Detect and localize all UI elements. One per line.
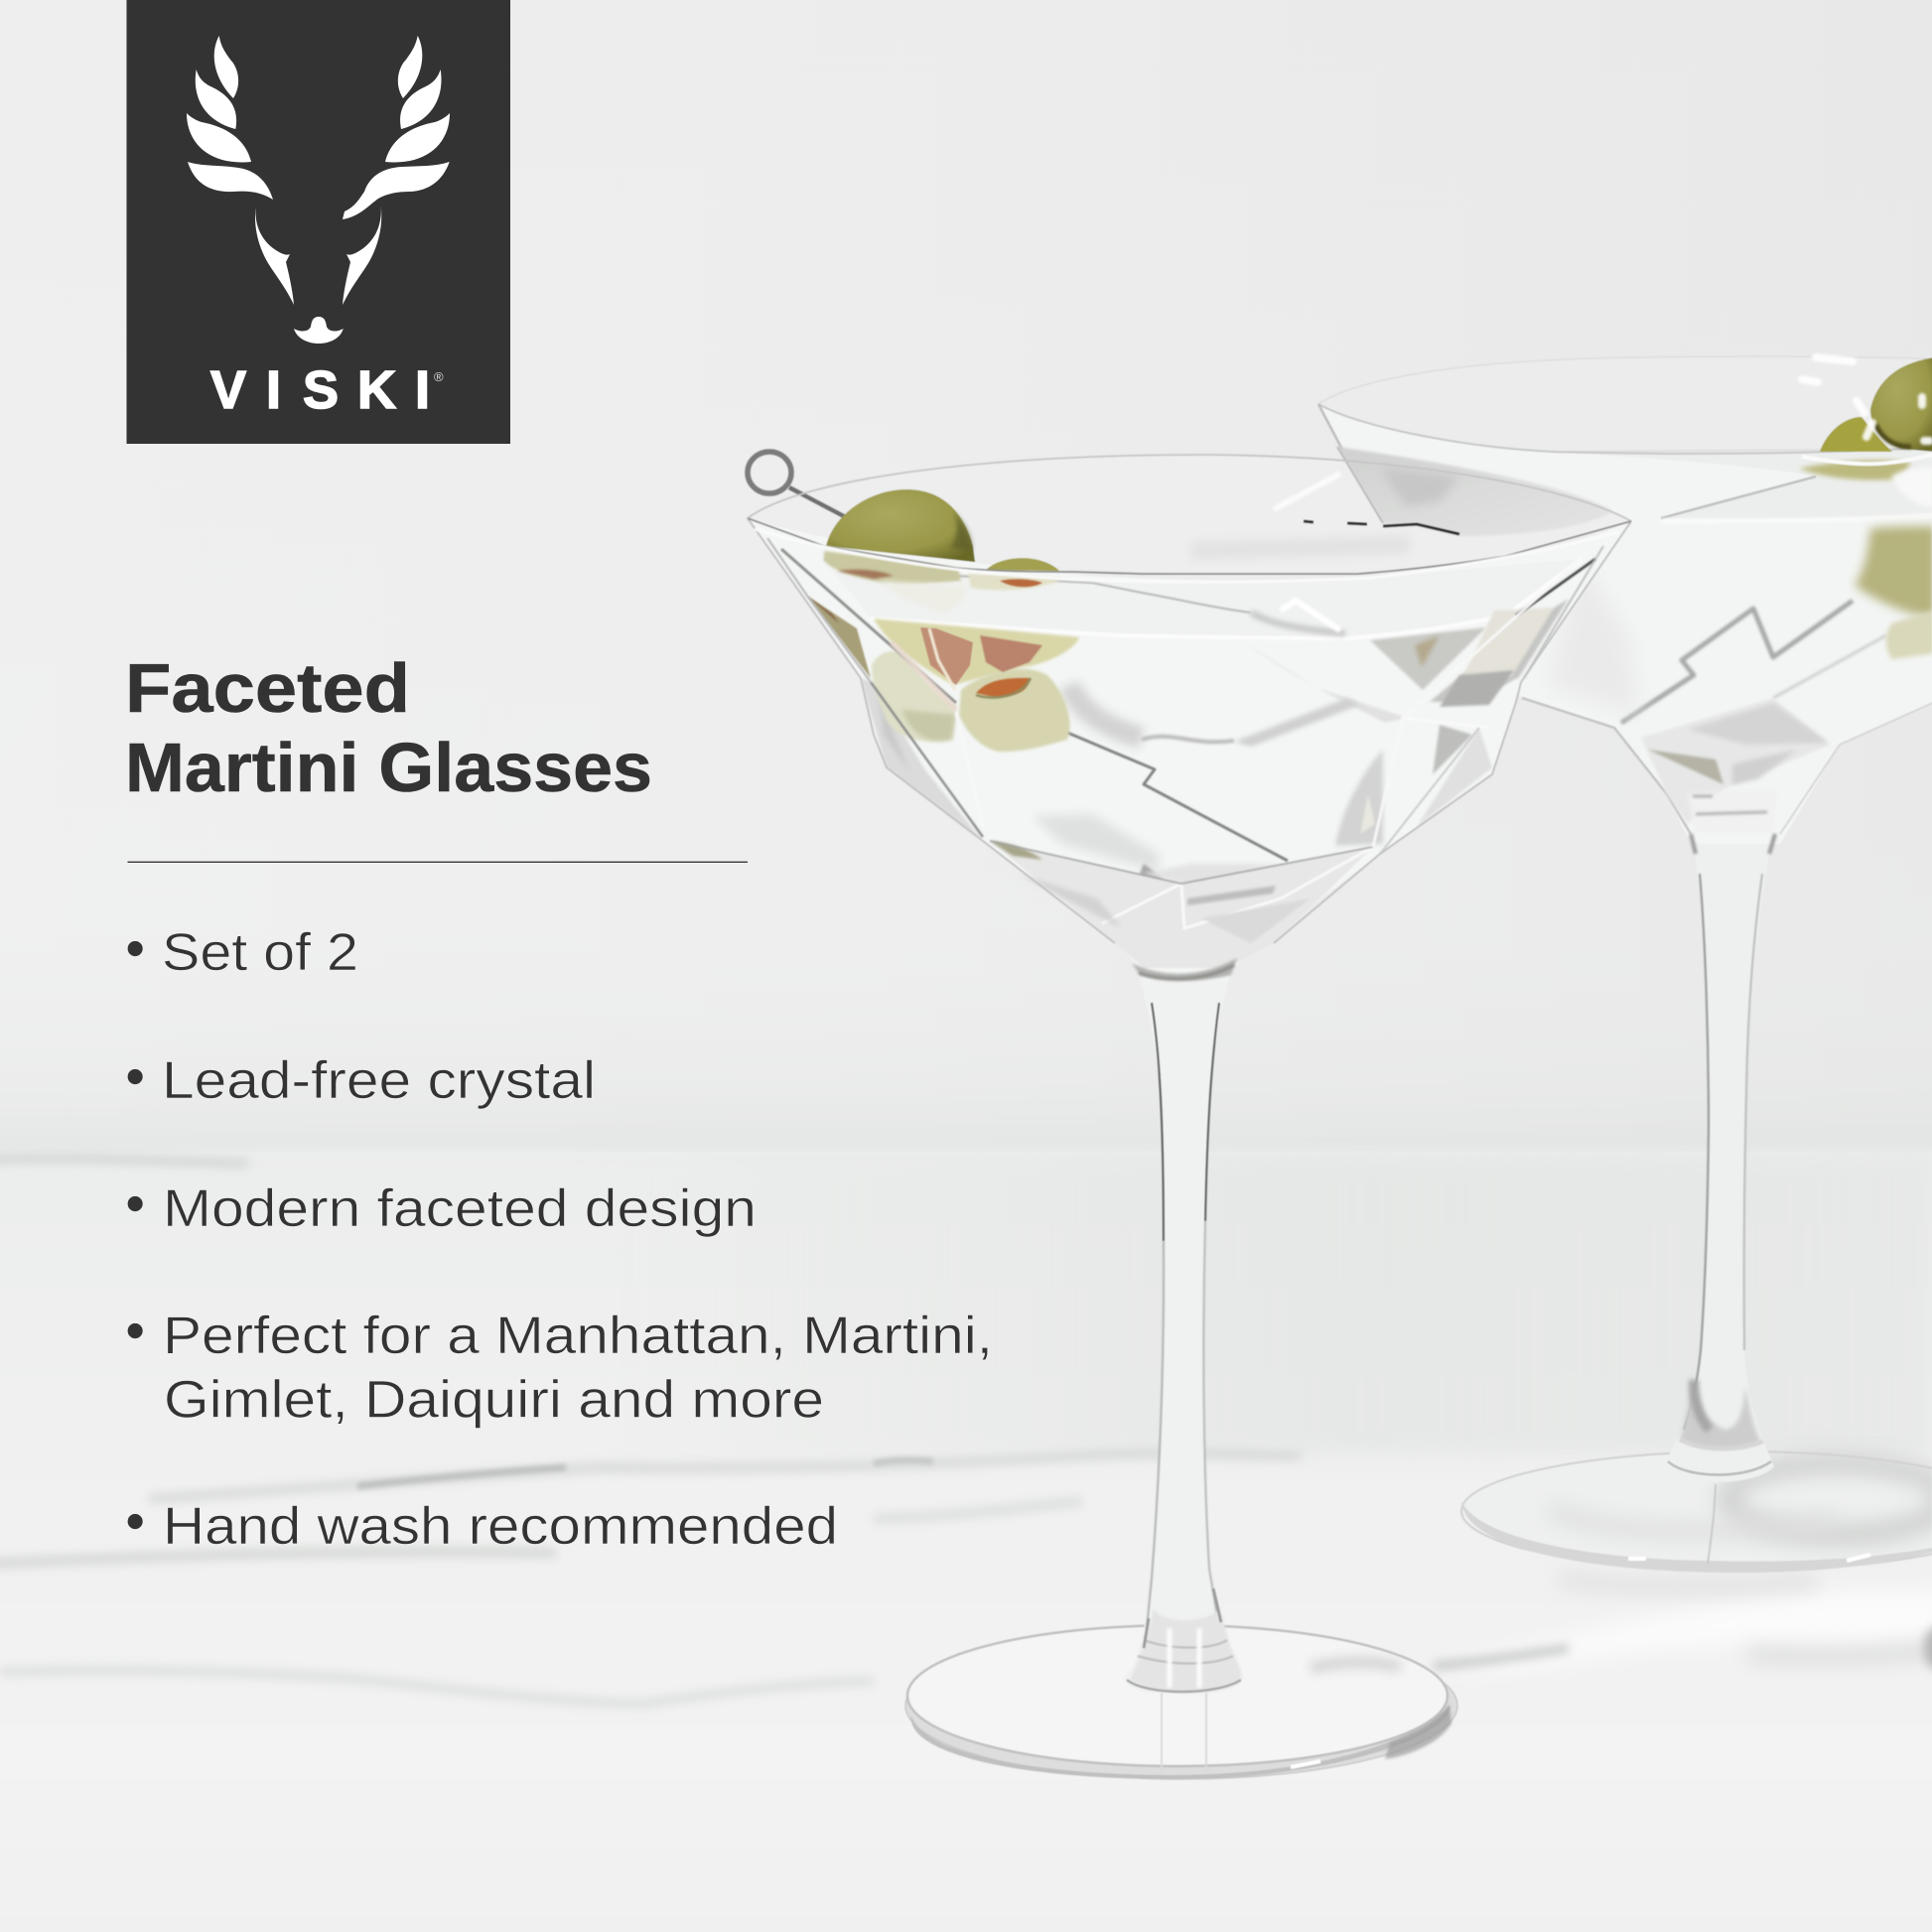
logo block (127, 0, 510, 444)
bullet: perfect for cocktails: • (125, 1299, 145, 1363)
logo: wordmark: VISKI (210, 360, 430, 420)
refracted olive band in liquid (874, 619, 1079, 685)
front glass: liquid surface band (824, 559, 1582, 640)
front glass: air above liquid (748, 455, 1631, 575)
divider line (127, 862, 748, 863)
logo: right antler leaves (343, 36, 450, 305)
front glass: back glass seen through rim (1337, 447, 1613, 536)
front glass: left side facets (861, 678, 983, 841)
bullet: set of 2: • (125, 916, 145, 981)
front glass: skewer and pick ring (748, 452, 844, 516)
bullet: lead-free crystal: • (125, 1044, 145, 1109)
back glass: zigzag refraction (1621, 601, 1853, 723)
bullet: lead-free crystal: Lead-free crystal (162, 1051, 596, 1110)
title (125, 649, 652, 806)
bullet: modern faceted design: • (125, 1172, 145, 1236)
olive above rim (826, 489, 975, 562)
feature list (125, 916, 993, 1556)
bullet: modern faceted design: Modern faceted design (163, 1179, 757, 1238)
tan wedge at left of bowl (807, 596, 871, 678)
second olive (986, 558, 1059, 571)
back glass: stem (1663, 834, 1774, 1482)
bullet: set of 2 (125, 916, 358, 982)
front glass: olives (767, 489, 1079, 837)
logo: left antler leaves (187, 36, 294, 305)
pale olive right (959, 669, 1070, 752)
olive below rim (824, 551, 961, 586)
title: Martini Glasses (125, 729, 652, 806)
back glass: olives above rim (1870, 357, 1932, 452)
front glass: rim (748, 455, 1631, 582)
back glass: bowl (1318, 356, 1932, 854)
light and shadows on the table (1430, 1579, 1932, 1670)
front martini glass (748, 447, 1631, 1779)
front glass: zigzag refraction (1065, 732, 1288, 861)
back glass: shaded side of liquid (1549, 556, 1638, 715)
front glass: stem (1123, 949, 1245, 1694)
bullet: hand wash: • (125, 1489, 145, 1554)
front glass: base (905, 1625, 1457, 1779)
bullet: hand wash: Hand wash recommended (163, 1497, 838, 1556)
front glass: interior shadow facets (1370, 627, 1486, 690)
back martini glass (1318, 356, 1932, 1573)
back glass: olive below rim (1799, 461, 1911, 481)
logo: nose (294, 317, 344, 344)
front glass: right side wedge (1430, 599, 1569, 702)
pale olive left (872, 651, 956, 742)
back glass: submerged olive (1855, 526, 1932, 618)
front glass: bottom facets (990, 841, 1373, 968)
back glass: lower facets (1641, 698, 1830, 824)
title: Faceted (125, 649, 410, 727)
bullet: perfect for cocktails: Gimlet, Daiquiri and more (164, 1370, 824, 1430)
back glass: base (1461, 1451, 1932, 1573)
back glass: air above liquid (1553, 449, 1932, 520)
facet edge over olive (781, 549, 956, 703)
front glass: bowl body (748, 447, 1631, 981)
bullet: perfect for cocktails (125, 1299, 993, 1430)
pimentos (920, 627, 973, 685)
bullet: perfect for cocktails: Perfect for a Manhattan, Martini, (163, 1307, 993, 1365)
bullet: set of 2: Set of 2 (162, 923, 358, 982)
logo: registered mark: ® (434, 369, 444, 384)
